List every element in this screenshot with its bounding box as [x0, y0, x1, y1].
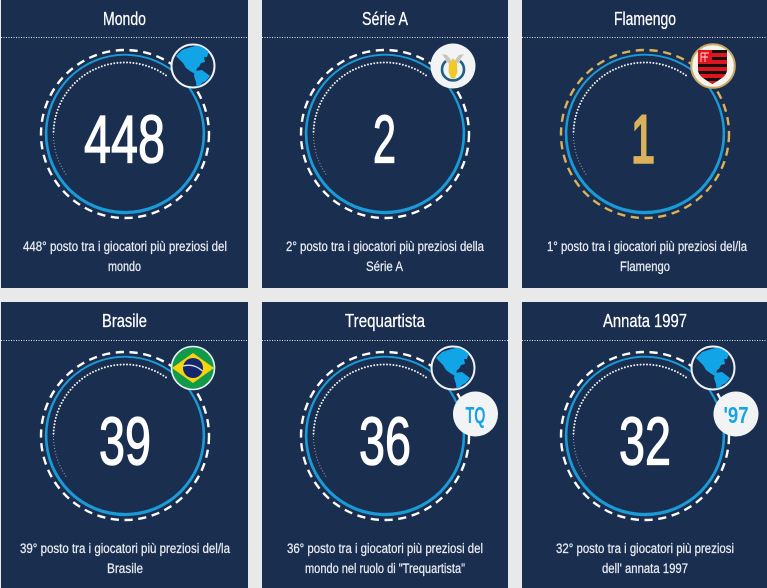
number: 2	[373, 102, 396, 178]
panel: Flamengo	[522, 0, 767, 288]
heading: Mondo: Mondo	[103, 9, 146, 29]
panel: Mondo	[1, 0, 248, 288]
heading: Annata 1997: Annata 1997	[603, 311, 687, 331]
badge: TQ	[453, 392, 498, 436]
number: 1	[631, 102, 655, 178]
caption: Brasile	[107, 561, 143, 576]
caption	[547, 239, 747, 274]
caption	[286, 239, 484, 274]
panel: Série A	[262, 0, 508, 288]
badge: '97: '97	[724, 402, 748, 428]
icon: Série A logo	[430, 44, 476, 88]
number: 32	[619, 404, 671, 480]
number: 39	[99, 404, 151, 480]
caption: mondo	[108, 259, 141, 274]
ring gauge	[561, 50, 729, 218]
caption	[23, 239, 227, 274]
caption	[20, 541, 230, 576]
panel: Brasile	[1, 302, 248, 588]
ring gauge	[301, 352, 469, 520]
caption: Série A	[366, 259, 403, 274]
badge: TQ: TQ	[466, 402, 486, 428]
ring gauge	[41, 352, 209, 520]
icon: globe	[432, 346, 474, 392]
ring gauge	[41, 50, 209, 218]
ring gauge	[561, 352, 729, 520]
caption: Flamengo	[620, 259, 670, 274]
heading: Série A: Série A	[362, 9, 408, 29]
icon: Flamengo crest	[691, 44, 735, 88]
icon: globe	[692, 346, 734, 392]
heading: Trequartista: Trequartista	[345, 311, 426, 331]
caption: mondo nel ruolo di "Trequartista"	[305, 561, 465, 576]
icon: Brazil flag	[172, 346, 214, 390]
caption: 448° posto tra i giocatori più preziosi del	[23, 239, 227, 254]
panel: Annata 1997	[522, 302, 767, 588]
caption: 36° posto tra i giocatori più preziosi del	[287, 541, 483, 556]
heading: Flamengo: Flamengo	[614, 9, 676, 29]
ring gauge	[301, 50, 469, 218]
panel: Trequartista	[262, 302, 508, 588]
icon: globe	[172, 44, 214, 90]
heading: Brasile: Brasile	[102, 311, 147, 331]
caption	[287, 541, 483, 576]
number: 36	[359, 404, 411, 480]
badge: '97	[714, 392, 758, 436]
caption	[556, 541, 734, 576]
caption: 32° posto tra i giocatori più preziosi	[556, 541, 734, 556]
caption: dell' annata 1997	[602, 561, 688, 576]
number: 448	[84, 102, 165, 178]
caption: 39° posto tra i giocatori più preziosi del/la	[20, 541, 230, 556]
caption: 2° posto tra i giocatori più preziosi della	[286, 239, 484, 254]
